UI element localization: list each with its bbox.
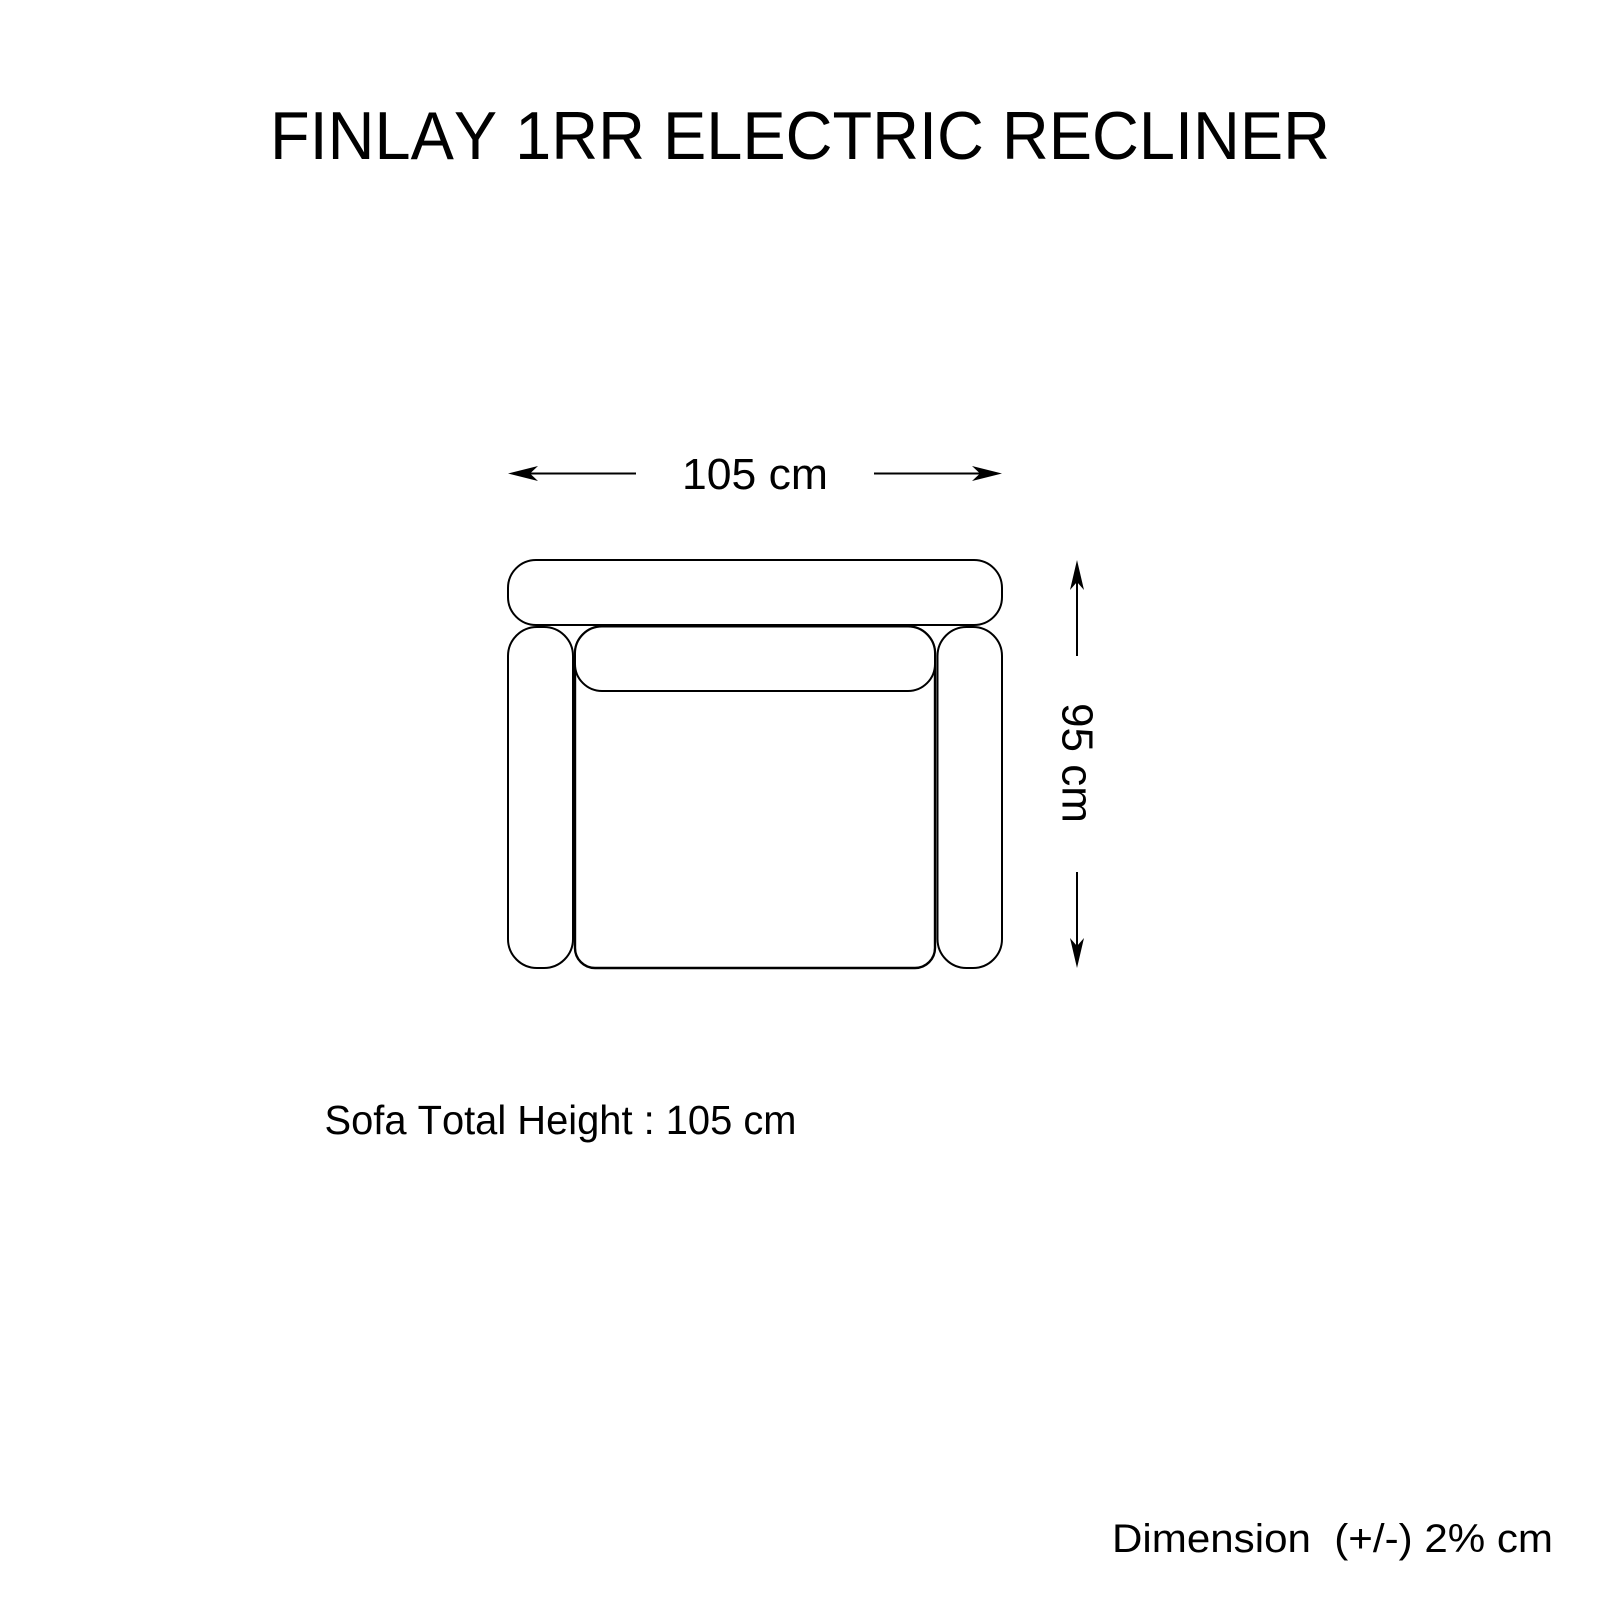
arrow: width right	[874, 466, 1002, 481]
arrow: height down	[1070, 872, 1084, 968]
arrow: height up	[1070, 560, 1084, 656]
width dimension: 105 cm	[508, 450, 1002, 499]
headrest cushion	[575, 626, 935, 691]
total height note: Sofa Total Height : 105 cm	[324, 1097, 796, 1143]
arrow: width left	[508, 466, 636, 481]
seat	[575, 626, 935, 968]
height label: 95 cm	[1052, 703, 1102, 823]
height dimension: 95 cm	[1052, 560, 1102, 968]
backrest	[508, 560, 1002, 625]
right armrest	[938, 627, 1002, 968]
tolerance note: Dimension (+/-) 2% cm	[1112, 1517, 1553, 1561]
title: FINLAY 1RR ELECTRIC RECLINER	[270, 98, 1330, 174]
left armrest	[508, 627, 573, 968]
width label: 105 cm	[682, 450, 828, 499]
sofa top-view outline	[508, 560, 1002, 968]
